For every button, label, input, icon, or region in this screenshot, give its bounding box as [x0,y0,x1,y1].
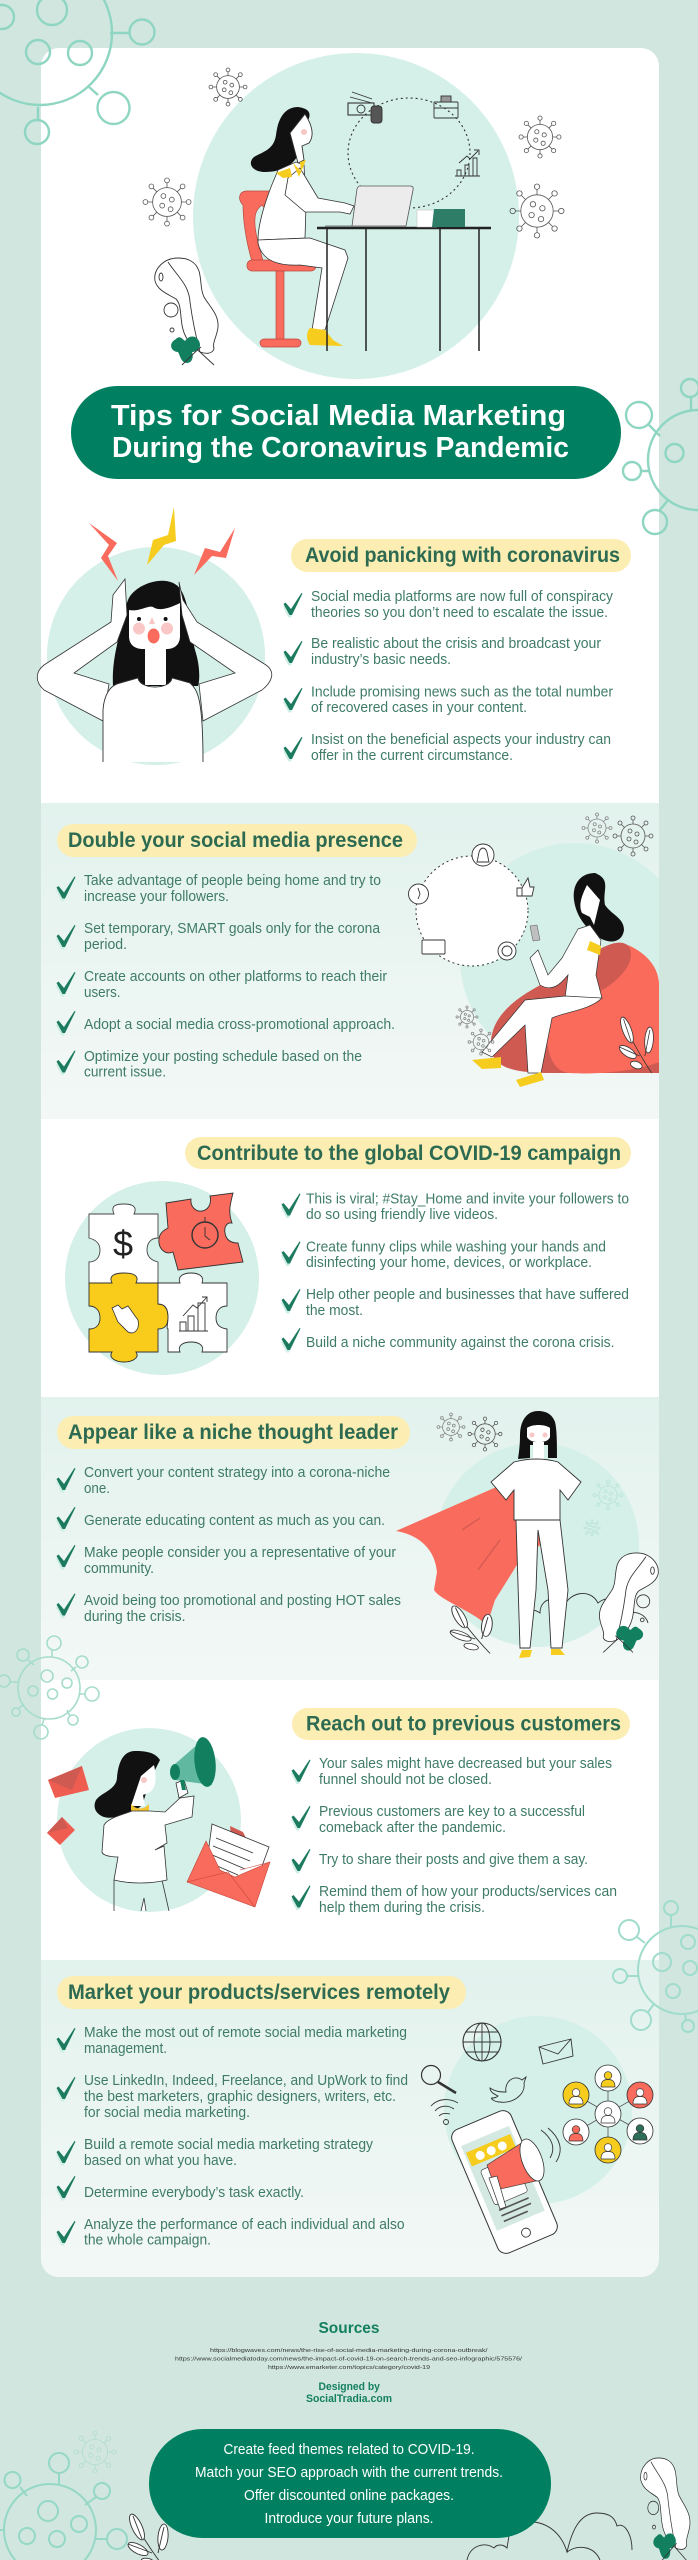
icon: briefcase [434,96,458,118]
designer credit [306,2381,392,2405]
closing tips banner [149,2429,551,2538]
check list [56,1465,401,1625]
check list: based on what you have. [84,2153,237,2169]
check list: the whole campaign. [84,2232,211,2248]
check list: for social media marketing. [84,2105,250,2121]
panel: avoid panicking [37,507,631,765]
illustration: puzzle pieces: $ [113,1223,133,1264]
sources: Sources [318,2320,380,2337]
check list: This is viral; #Stay_Home and invite your followers to [306,1192,629,1208]
check list: Convert your content strategy into a corona-niche [84,1465,390,1481]
heading pill: Appear like a niche thought leader [68,1421,398,1444]
check list: one. [84,1481,110,1497]
closing tips banner: Match your SEO approach with the current trends. [195,2464,503,2481]
heading pill: Market your products/services remotely [68,1981,450,2004]
heading pill [57,1416,410,1449]
panel: contribute to campaign [65,1137,631,1375]
check list: period. [84,937,127,953]
illustration: puzzle pieces [65,1181,259,1375]
decorative virus: right edge [613,1901,698,2032]
panel: market remotely [41,1960,659,2277]
small pale virus [74,2431,116,2473]
check list: Help other people and businesses that have suffered [306,1287,629,1303]
heading pill [57,824,417,857]
sources: https://blogwaves.com/news/the-rise-of-social-media-marketing-during-corona-outbreak/ [210,2348,488,2354]
check list: disinfecting your home, devices, or workplace. [306,1255,592,1271]
heading pill [291,539,631,572]
heading pill [57,1976,466,2009]
check list: current issue. [84,1064,166,1080]
icon: bar chart [455,150,480,176]
check list: Adopt a social media cross-promotional approach. [84,1017,395,1033]
check list: Remind them of how your products/services can [319,1884,617,1900]
check list: Make people consider you a representative of your [84,1545,396,1561]
designer credit: Designed by [318,2381,381,2393]
check list: Generate educating content as much as you can. [84,1513,385,1529]
closing tips banner: Create feed themes related to COVID-19. [224,2441,474,2458]
illustration: woman with megaphone [47,1728,270,1912]
check list: Your sales might have decreased but your sales [319,1756,612,1772]
closing tips banner: Introduce your future plans. [264,2510,434,2527]
white content card [41,48,659,2277]
title banner: Tips for Social Media Marketing [111,400,566,432]
check list: management. [84,2041,167,2057]
check list: comeback after the pandemic. [319,1820,506,1836]
closing tips banner: Offer discounted online packages. [244,2487,454,2504]
check list: industry’s basic needs. [311,652,451,668]
check list: Include promising news such as the total number [311,684,613,700]
illustration: phone and network [422,2016,653,2256]
check list: Determine everybody’s task exactly. [84,2185,304,2201]
check list: Avoid being too promotional and posting HOT sales [84,1593,401,1609]
stacked books [417,209,465,227]
illustration: caped woman [396,1411,658,1658]
check list [283,589,614,764]
sources: https://www.socialmediatoday.com/news/the-impact-of-covid-19-on-search-trends-and-seo-infographic/575576/ [175,2356,523,2362]
decorative virus: top left [0,0,154,144]
icon: money [348,92,382,123]
check list: of recovered cases in your content. [311,700,527,716]
check list: Be realistic about the crisis and broadcast your [311,636,601,652]
heading pill: Double your social media presence [68,829,403,852]
check list: increase your followers. [84,889,229,905]
check list: the best marketers, graphic designers, writers, etc. [84,2089,396,2105]
check list: theories so you don’t need to escalate the issue. [311,605,608,621]
small viruses [143,68,564,238]
laptop [325,186,413,226]
title banner [71,386,621,479]
check list: Create accounts on other platforms to reach their [84,969,387,985]
heading pill: Avoid panicking with coronavirus [305,544,620,567]
heading pill [185,1137,631,1169]
check list: community. [84,1561,154,1577]
check list [56,2025,408,2248]
check list: Try to share their posts and give them a say. [319,1852,588,1868]
icon: orbit dashed circle [348,98,470,208]
designer credit: SocialTradia.com [306,2393,392,2405]
bottom right plant [641,2458,690,2560]
check list: Insist on the beneficial aspects your industry can [311,732,611,748]
desk [317,228,491,351]
check list: Create funny clips while washing your hands and [306,1240,606,1256]
decorative virus: right of title [623,379,698,534]
panel: reach out to customers [47,1708,630,1916]
check list: users. [84,985,120,1001]
check list [281,1192,629,1352]
decorative virus: left edge [0,1636,99,1739]
check list: funnel should not be closed. [319,1772,492,1788]
title banner: During the Coronavirus Pandemic [112,432,569,464]
sources [175,2320,523,2371]
illustration: panicked woman [37,507,272,765]
illustration: woman on beanbag [408,812,659,1087]
check list: during the crisis. [84,1609,186,1625]
panel: double your presence [41,803,690,1119]
hero mint circle [193,53,519,379]
check list: Use LinkedIn, Indeed, Freelance, and UpWork to find [84,2073,408,2089]
heading pill: Reach out to previous customers [306,1712,621,1736]
sources: https://www.emarketer.com/topics/category/covid-19 [268,2365,430,2371]
check list: Make the most out of remote social media marketing [84,2025,407,2041]
panel: hero illustration [143,53,564,379]
bottom left leaves [126,2512,169,2560]
check list: offer in the current circumstance. [311,748,513,764]
bottom bushes [467,2513,632,2560]
heading pill: Contribute to the global COVID-19 campaign [197,1142,621,1165]
red office chair [240,191,316,347]
check list: Optimize your posting schedule based on the [84,1049,362,1065]
woman at desk [251,107,354,346]
check list [56,873,395,1080]
check list: Take advantage of people being home and try to [84,873,381,889]
check list: do so using friendly live videos. [306,1207,498,1223]
check list: Build a remote social media marketing strategy [84,2137,374,2153]
check list: the most. [306,1303,363,1319]
check list: help them during the crisis. [319,1900,485,1916]
check list: Build a niche community against the corona crisis. [306,1335,614,1351]
check list: Set temporary, SMART goals only for the corona [84,921,380,937]
plant [155,258,218,365]
check list: Social media platforms are now full of conspiracy [311,589,614,605]
decorative virus: bottom left [0,2453,127,2560]
heading pill [292,1708,630,1740]
check list: Previous customers are key to a successful [319,1804,585,1820]
panel: thought leader [41,1397,659,1680]
check list: Analyze the performance of each individual and also [84,2217,405,2233]
check list [291,1756,617,1916]
